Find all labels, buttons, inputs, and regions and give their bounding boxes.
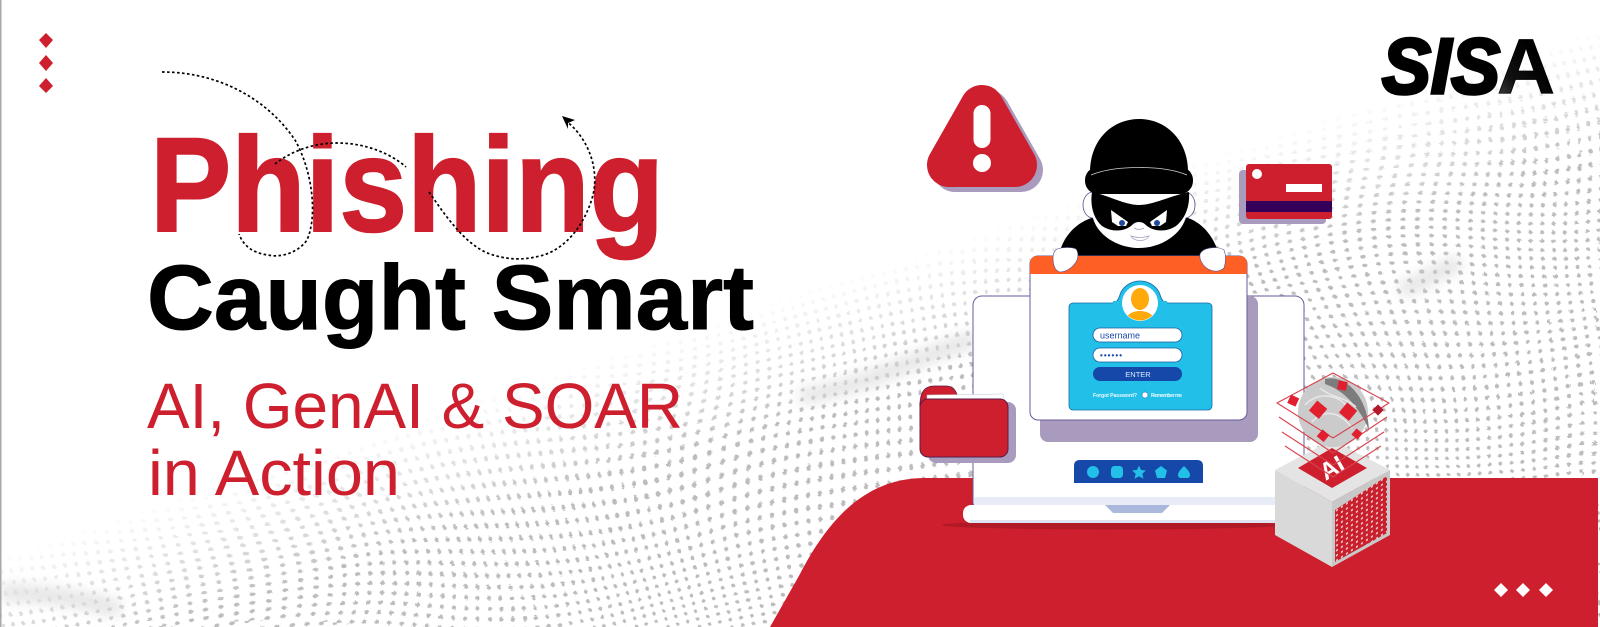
login panel: •••••• <box>1100 351 1122 360</box>
red corner shape <box>770 478 1598 627</box>
icon: credit card <box>1239 164 1332 224</box>
AI badge: AI <box>1315 451 1349 486</box>
login panel: username <box>1100 330 1140 340</box>
decorative diamonds, bottom right <box>1494 583 1553 597</box>
AI badge <box>1298 448 1367 488</box>
brain and layers <box>1277 373 1389 477</box>
icon: folder <box>920 386 1016 463</box>
mask <box>1091 192 1189 230</box>
AI cube <box>1275 373 1390 567</box>
icon: warning triangle <box>949 105 1021 172</box>
subtitle: AI, GenAI & SOAR <box>147 370 683 442</box>
login panel: Forgot Password? <box>1093 393 1137 399</box>
hands <box>1053 248 1078 272</box>
beanie <box>1090 119 1188 172</box>
login window <box>1030 248 1247 420</box>
ears <box>1083 192 1103 218</box>
login panel: ENTER <box>1125 370 1151 379</box>
cube body <box>1275 440 1390 502</box>
login panel <box>1069 281 1212 410</box>
shoulders <box>1058 217 1220 258</box>
toolbar <box>1074 460 1203 483</box>
SISA logo: A <box>1497 22 1555 110</box>
title: Phishing: Phishing <box>150 111 664 260</box>
mouth <box>1131 236 1149 240</box>
login panel: Remember me <box>1151 393 1182 399</box>
data panel <box>1335 476 1387 562</box>
laptop <box>942 296 1315 530</box>
SISA logo: SIS <box>1382 22 1500 110</box>
floating red cubes <box>1287 380 1384 442</box>
page edge line <box>0 0 2 627</box>
title: Caught Smart: Caught Smart <box>147 247 754 349</box>
face <box>1092 190 1187 248</box>
subtitle: in Action <box>148 437 400 509</box>
subtitle <box>147 370 683 509</box>
dashed fishing-line arrow <box>162 72 595 259</box>
decorative diamonds, top left <box>39 33 53 93</box>
thief <box>1058 119 1220 258</box>
